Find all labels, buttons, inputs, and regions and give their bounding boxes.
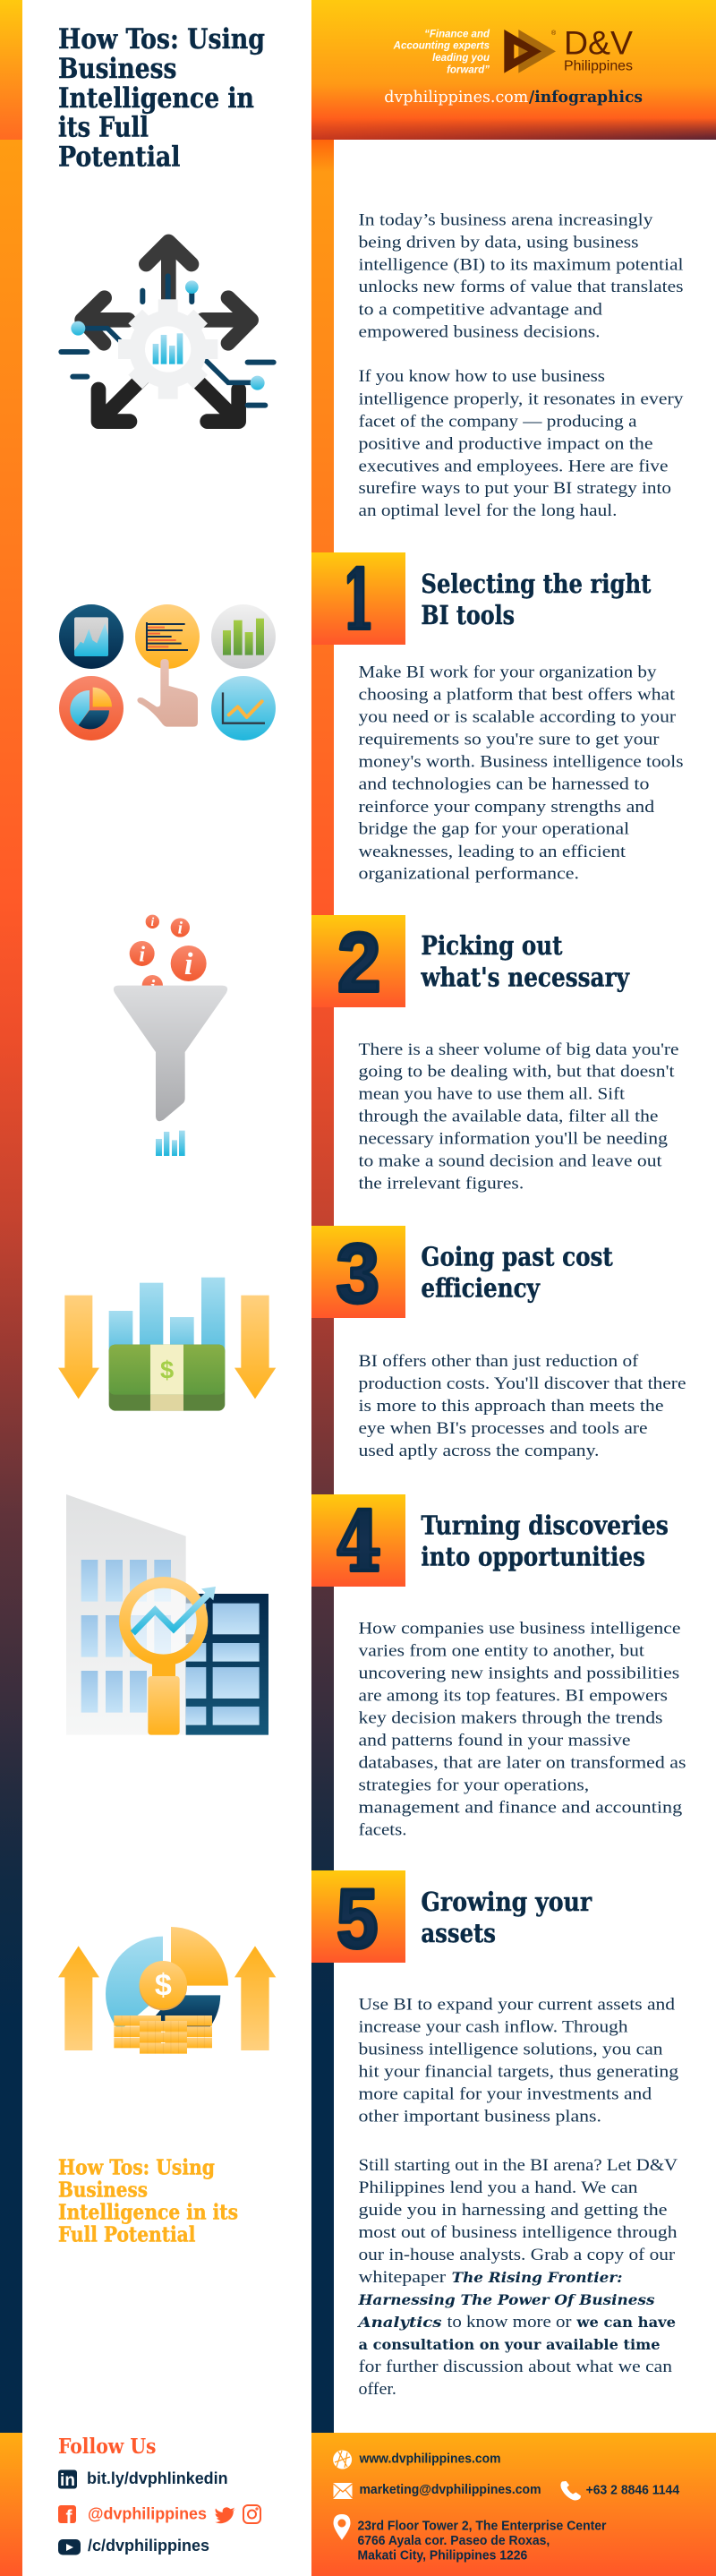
address: 23rd Floor Tower 2, The Enterprise Center	[358, 2519, 607, 2533]
step 2 text: to make a sound decision and leave out	[358, 1152, 662, 1171]
email: marketing@dvphilippines.com	[360, 2483, 541, 2497]
step 2 number box: 2	[337, 915, 381, 1009]
repeated title in left column: Intelligence in its	[58, 2200, 238, 2224]
address: 6766 Ayala cor. Paseo de Roxas,	[358, 2534, 550, 2548]
step 4 text: key decision makers through the trends	[358, 1708, 662, 1727]
closing call to action text: Analytics	[356, 2314, 442, 2331]
step 1 heading: Selecting the right	[421, 569, 651, 599]
intro text: surefire ways to put your BI strategy into	[358, 479, 671, 498]
gear	[118, 299, 217, 399]
icon: instagram	[243, 2505, 260, 2523]
step 4 number box: 4	[335, 1493, 381, 1590]
step 3 text	[358, 1352, 686, 1460]
tagline: forward”	[447, 64, 490, 75]
closing call to action text: a consultation on your available time	[358, 2336, 661, 2353]
repeated title in left column: Business	[58, 2178, 148, 2202]
website url: /infographics	[529, 88, 643, 107]
intro text: facet of the company — producing a	[358, 412, 637, 432]
panel: contact footer	[311, 2433, 716, 2576]
step 2 text: through the available data, filter all the	[358, 1108, 659, 1126]
step 5 number box	[311, 1870, 405, 1965]
step 1 heading: BI tools	[421, 600, 515, 630]
step 1 text: reinforce your company strengths and	[358, 798, 655, 817]
intro text: empowered business decisions.	[358, 322, 600, 341]
closing call to action text: most out of business intelligence through	[358, 2223, 678, 2242]
closing call to action text: offer.	[358, 2380, 396, 2399]
step 1 text: requirements so you're sure to get your	[358, 731, 660, 749]
hand	[137, 659, 198, 727]
closing call to action text: The Rising Frontier:	[452, 2269, 622, 2286]
step 2 text: the irrelevant figures.	[358, 1175, 524, 1194]
icon: funnel filtering information: i	[150, 915, 154, 929]
step 3 heading: efficiency	[421, 1272, 541, 1303]
step 1 text: you need or is scalable according to your	[358, 707, 677, 727]
icon: funnel filtering information: i	[184, 947, 193, 981]
panel: follow us	[58, 2435, 260, 2555]
step 4 text: management and finance and accounting	[358, 1798, 683, 1817]
intro text: being driven by data, using business	[358, 233, 639, 252]
step 4 text: varies from one entity to another, but	[358, 1641, 645, 1660]
logo wordmark: D&V	[564, 25, 633, 62]
step 1 text: money's worth. Business intelligence tools	[358, 752, 684, 771]
step 5 text	[358, 1995, 679, 2126]
icon: money and falling arrows	[58, 1278, 276, 1411]
step 5 text: hit your financial targets, thus generating	[358, 2063, 679, 2081]
title: its Full	[58, 112, 149, 144]
intro text	[358, 211, 684, 520]
logo wordmark: ®	[551, 30, 557, 37]
step 1 number box	[311, 552, 405, 648]
title: Intelligence in	[58, 82, 254, 115]
title: How Tos: Using	[58, 23, 265, 56]
step 5 text: other important business plans.	[358, 2108, 601, 2126]
step 5 text: business intelligence solutions, you can	[358, 2040, 663, 2059]
step 4 text	[358, 1619, 686, 1839]
step 3 number box: 3	[337, 1227, 379, 1320]
left gradient bar	[0, 0, 22, 2576]
tagline: leading you	[432, 53, 490, 64]
step 3 text: BI offers other than just reduction of	[358, 1352, 639, 1371]
step 3 heading: Going past cost	[421, 1242, 613, 1272]
step 5 heading: assets	[421, 1918, 496, 1948]
step 1 text: organizational performance.	[358, 865, 579, 883]
logo mark	[504, 30, 556, 73]
icon: funnel filtering information	[114, 915, 227, 1156]
closing call to action text: we can have	[575, 2314, 676, 2331]
step 1 text: choosing a platform that best offers what	[358, 685, 676, 704]
intro text: intelligence properly, it resonates in every	[358, 390, 684, 408]
step 5 number box: 5	[337, 1871, 378, 1965]
step 3 text: used aptly across the company.	[358, 1442, 600, 1460]
step 4 heading: Turning discoveries	[421, 1511, 669, 1541]
website url	[384, 88, 643, 107]
tagline: Accounting experts	[393, 41, 490, 52]
step 4 text: and patterns found in your massive	[358, 1731, 630, 1750]
closing call to action text: guide you in harnessing and getting the	[358, 2201, 668, 2220]
icon: funnel filtering information: i	[178, 920, 183, 938]
icon: dashboard circles and hand	[59, 604, 276, 740]
address: Makati City, Philippines 1226	[358, 2549, 527, 2563]
logo wordmark: Philippines	[564, 59, 633, 73]
icon: arrows from gear	[61, 242, 274, 422]
icon: growing assets pie and coins: $	[155, 1968, 172, 2002]
linkedin link: bit.ly/dvphlinkedin	[87, 2469, 228, 2487]
logo wordmark	[551, 25, 633, 73]
step 1 text: Make BI work for your organization by	[358, 663, 657, 682]
step 5 heading: Growing your	[421, 1887, 592, 1917]
step 4 heading	[421, 1511, 669, 1571]
step 5 heading	[421, 1887, 592, 1948]
icon: facebook	[58, 2505, 76, 2528]
step 2 text: There is a sheer volume of big data you're	[358, 1040, 678, 1059]
icon: money and falling arrows: $	[160, 1356, 174, 1383]
closing call to action text: for further discussion about what we can	[358, 2358, 673, 2376]
step 4 text: databases, that are later on transformed as	[358, 1753, 686, 1772]
closing call to action text	[356, 2156, 678, 2399]
repeated title in left column: How Tos: Using	[58, 2155, 215, 2179]
step 1 text: and technologies can be harnessed to	[358, 775, 650, 794]
step 4 text: How companies use business intelligence	[358, 1619, 680, 1638]
step 2 text: going to be dealing with, but that doesn't	[358, 1063, 675, 1082]
step 2 heading	[420, 930, 630, 993]
intro text: an optimal level for the long haul.	[358, 501, 618, 520]
intro text: intelligence (BI) to its maximum potential	[358, 255, 684, 274]
step 4 text: facets.	[358, 1820, 406, 1839]
icon: linkedin: in	[60, 2471, 75, 2490]
website url: dvphilippines.com	[384, 88, 528, 107]
step 4 text: are among its top features. BI empowers	[358, 1686, 668, 1705]
intro text: In today’s business arena increasingly	[358, 211, 653, 229]
intro text: If you know how to use business	[358, 367, 605, 386]
phone number: +63 2 8846 1144	[586, 2484, 679, 2498]
icon: youtube	[58, 2539, 81, 2555]
icon: globe	[333, 2450, 352, 2469]
social handle: @dvphilippines	[88, 2503, 207, 2522]
icon: funnel filtering information: i	[139, 943, 145, 966]
step 2 number box	[311, 915, 405, 1009]
step 2 text: mean you have to use them all. Sift	[358, 1085, 626, 1104]
intro text: positive and productive impact on the	[358, 434, 653, 453]
closing call to action text: whitepaper	[358, 2268, 447, 2287]
repeated title in left column	[58, 2155, 238, 2247]
icon: buildings and magnifier	[66, 1494, 268, 1735]
icon: funnel filtering information: i	[149, 978, 155, 997]
closing call to action text: to know more or	[448, 2313, 572, 2332]
step 5 text: Use BI to expand your current assets and	[358, 1995, 676, 2015]
follow us heading: Follow Us	[58, 2435, 156, 2459]
website: www.dvphilippines.com	[359, 2452, 501, 2467]
intro text: unlocks new forms of value that translates	[358, 278, 684, 296]
step 2 heading: what's necessary	[420, 963, 630, 993]
step 1 heading	[421, 569, 651, 630]
closing call to action text: Harnessing The Power Of Business	[357, 2291, 655, 2308]
step 5 text: more capital for your investments and	[358, 2084, 652, 2104]
step 2 text	[358, 1040, 678, 1194]
title: Potential	[58, 141, 181, 173]
step 3 heading	[421, 1242, 613, 1303]
closing call to action text: our in-house analysts. Grab a copy of our	[358, 2246, 676, 2264]
step 3 text: eye when BI's processes and tools are	[358, 1419, 648, 1438]
icon: location pin	[333, 2514, 351, 2540]
header banner	[311, 0, 716, 140]
step 4 number box	[311, 1493, 405, 1590]
step 1 text: bridge the gap for your operational	[358, 820, 629, 839]
step 1 text: weaknesses, leading to an efficient	[358, 843, 626, 861]
step 2 heading: Picking out	[421, 930, 562, 961]
icon: twitter	[215, 2507, 235, 2523]
tagline: “Finance and	[424, 29, 490, 39]
icon: envelope	[333, 2483, 353, 2499]
step 4 heading: into opportunities	[421, 1541, 645, 1571]
title: Business	[58, 53, 176, 85]
step 4 text: strategies for your operations,	[358, 1776, 589, 1794]
tagline	[393, 29, 490, 75]
step 4 text: uncovering new insights and possibilities	[358, 1664, 679, 1682]
right gradient band	[311, 140, 334, 2433]
address	[358, 2519, 607, 2563]
step 3 text: is more to this approach than meets the	[358, 1397, 664, 1416]
repeated title in left column: Full Potential	[58, 2222, 196, 2247]
icon: phone	[560, 2481, 581, 2500]
intro text: to a competitive advantage and	[358, 301, 603, 319]
closing call to action text: Still starting out in the BI arena? Let D&V	[358, 2156, 678, 2175]
step 1 text	[358, 663, 684, 883]
youtube link: /c/dvphilippines	[88, 2536, 209, 2555]
step 2 text: necessary information you'll be needing	[358, 1130, 668, 1149]
icon: facebook: f	[66, 2507, 73, 2528]
step 1 number box: 1	[342, 552, 374, 648]
title	[58, 23, 265, 173]
closing call to action text: Philippines lend you a hand. We can	[358, 2178, 638, 2197]
icon: growing assets pie and coins	[58, 1927, 276, 2054]
step 3 text: production costs. You'll discover that there	[358, 1374, 686, 1393]
intro text: executives and employees. Here are five	[358, 457, 668, 475]
step 5 text: increase your cash inflow. Through	[358, 2018, 628, 2036]
step 3 number box	[311, 1226, 405, 1320]
